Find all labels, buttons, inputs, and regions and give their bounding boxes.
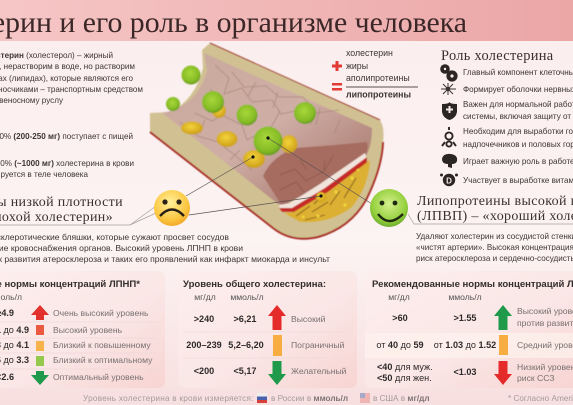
vessel lumen [162, 53, 372, 207]
text block: synthesized share [0, 159, 134, 179]
lipoprotein formula [332, 48, 418, 100]
icon: gears [440, 64, 458, 82]
panel: LDL norms: Близкий к оптимальному [53, 355, 153, 365]
panel: LDL norms: Близкий к повышенному [53, 340, 151, 350]
footer note: в России в ммоль/л [271, 394, 348, 403]
panel: total cholesterol: Высокий [291, 314, 326, 324]
panel: HDL norms: >1.55 [453, 313, 477, 323]
lipoprotein formula: жиры [346, 61, 368, 71]
panel: total cholesterol: мг/дл [194, 292, 216, 302]
equals sign [332, 83, 342, 90]
level markers [494, 305, 512, 385]
panel: HDL norms: <50 для жен. [377, 373, 432, 383]
panel: total cholesterol: Уровень общего холестерина: [183, 279, 326, 290]
panel: HDL norms: ммоль/л [448, 292, 482, 302]
icon: flag Russia [257, 393, 267, 403]
panel: HDL norms: >60 [392, 313, 408, 323]
panel: total cholesterol: <5,17 [233, 366, 257, 376]
panel: HDL norms: от 1.03 до 1.52 [434, 340, 496, 350]
panel: total cholesterol: 200–239 [186, 340, 222, 350]
panel: total cholesterol: Желательный [291, 366, 347, 376]
icon: brain [442, 154, 457, 168]
footer note: Уровень холестерина в крови измеряется: [83, 394, 254, 403]
leader lines [0, 136, 573, 225]
lipoprotein formula: липопротеины [346, 90, 411, 100]
heading: HDL [417, 194, 573, 224]
plaque surface [263, 142, 368, 206]
text block: HDL description [416, 232, 573, 263]
green HDL particles [166, 66, 316, 156]
lipoprotein formula: холестерин [346, 48, 393, 58]
icon: gender symbols [442, 127, 456, 147]
panel: total cholesterol: >6,21 [233, 314, 257, 324]
text block: cholesterol definition [0, 51, 143, 105]
role list [440, 64, 573, 186]
footer note: в США в мг/дл [373, 394, 430, 403]
level markers [268, 305, 286, 385]
level markers [31, 305, 49, 385]
yellow LDL particles [181, 104, 326, 202]
icon: flag USA [360, 393, 370, 403]
footer note [83, 393, 573, 403]
icon: nerve cell [441, 83, 456, 95]
panel: HDL norms: мг/дл [388, 292, 410, 302]
heading: LDL [0, 195, 123, 225]
panel: HDL norms: риск ССЗ [517, 373, 555, 383]
panel: total cholesterol: <200 [194, 366, 214, 376]
panel: LDL norms: Оптимальный уровень [53, 372, 144, 382]
panel: HDL norms: <40 для муж. [377, 362, 433, 372]
panel: total cholesterol: 5,2–6,20 [228, 340, 264, 350]
icon: happy face [370, 189, 408, 227]
title band [0, 0, 573, 41]
plus sign [332, 61, 342, 71]
heading: role of cholesterol: Роль холестерина [441, 48, 554, 64]
icon: vitamin D [440, 174, 458, 186]
panel: HDL norms [365, 271, 573, 388]
icon: vitamin D: D [446, 176, 452, 186]
text block: LDL description [0, 232, 330, 264]
vessel texture [180, 65, 340, 170]
panel: total cholesterol [178, 271, 357, 388]
panel: LDL norms: Высокий уровень [53, 325, 123, 335]
panel: total cholesterol: >240 [194, 314, 214, 324]
panel: LDL norms [0, 271, 165, 388]
vessel wall [150, 43, 384, 239]
lipoprotein formula: аполипротеины [346, 73, 410, 83]
panel: total cholesterol: Пограничный [291, 340, 345, 350]
role items text [463, 68, 573, 185]
panel: LDL norms: Очень высокий уровень [53, 308, 149, 318]
panel: HDL norms: от 40 до 59 [376, 340, 424, 350]
icon: shield [442, 102, 457, 120]
panel: total cholesterol: ммоль/л [230, 292, 264, 302]
panel: HDL norms: <1.03 [453, 367, 477, 377]
plaque fatty core [284, 160, 370, 222]
illustration: blood vessel [150, 43, 384, 239]
icon: sad face [154, 190, 190, 226]
